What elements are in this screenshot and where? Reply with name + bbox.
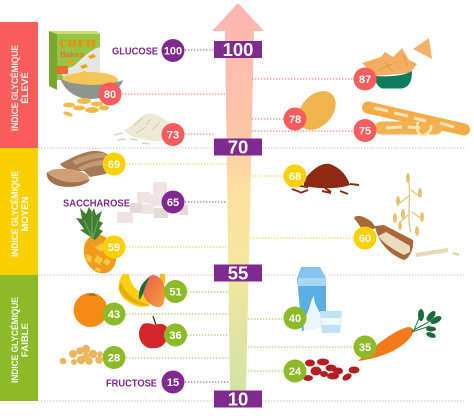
- icon: orange: [74, 293, 108, 327]
- panel: indice glycémique élevé: INDICE GLYCÉMIQUE: [9, 44, 21, 131]
- icon: corn flakes: flakes: [60, 50, 84, 59]
- badge: 28: [102, 346, 126, 369]
- panel: indice glycémique élevé: [0, 22, 38, 148]
- scale label 55: [214, 262, 262, 284]
- icon: kidney beans: [303, 358, 360, 382]
- panel: indice glycémique moyen: INDICE GLYCÉMIQUE: [9, 170, 21, 257]
- badge: 51: 51: [169, 286, 182, 298]
- icon: oats scoop: [354, 173, 459, 260]
- scale label 70: 70: [228, 136, 248, 158]
- scale label 10: 10: [228, 388, 248, 410]
- icon: tortilla chips: [362, 38, 432, 88]
- badge: 69: [102, 152, 126, 176]
- badge: 75: [354, 119, 376, 142]
- badge: 15: [162, 370, 184, 394]
- badge: 68: 68: [289, 171, 301, 183]
- badge: 51: [164, 280, 187, 303]
- badge: 73: 73: [167, 130, 179, 142]
- label: glucose: GLUCOSE: [112, 46, 158, 58]
- badge: 43: [102, 302, 126, 326]
- badge: 15: 15: [167, 377, 179, 389]
- badge: 35: [354, 336, 376, 358]
- icon: milk carton and glass: [297, 267, 342, 333]
- panel: indice glycémique faible: [0, 275, 38, 401]
- badge: 43: 43: [108, 309, 120, 321]
- badge: 24: 24: [289, 366, 302, 378]
- badge: 60: [354, 226, 376, 250]
- badge: 78: 78: [289, 114, 301, 126]
- badge: 80: 80: [104, 89, 116, 101]
- icon: rice: [114, 114, 170, 144]
- badge: 87: 87: [359, 74, 371, 86]
- badge: 60: 60: [359, 233, 371, 245]
- icon: banana and mango: [119, 274, 165, 307]
- badge: 100: [162, 39, 184, 62]
- badge: 69: 69: [108, 159, 120, 171]
- badge: 35: 35: [359, 342, 371, 354]
- icon: potato: [291, 84, 343, 137]
- icon: baguettes: [368, 108, 464, 135]
- badge: 80: [98, 82, 122, 106]
- badge: 59: 59: [108, 242, 120, 254]
- label: fructose: FRUCTOSE: [106, 378, 157, 390]
- badge: 40: [284, 306, 306, 330]
- badge: 36: 36: [169, 330, 182, 342]
- badge: 36: [164, 324, 187, 346]
- icon: pineapple: [76, 207, 122, 278]
- badge: 68: [284, 164, 306, 188]
- panel: indice glycémique faible: FAIBLE: [20, 322, 31, 357]
- badge: 28: 28: [108, 352, 120, 364]
- badge: 40: 40: [289, 313, 301, 325]
- panel: indice glycémique moyen: MOYEN: [20, 196, 31, 232]
- scale label 100: [214, 39, 262, 60]
- icon: corn flakes: corn: [59, 34, 96, 51]
- arrow: glycemic scale: [212, 3, 264, 392]
- scale label 10: [214, 388, 262, 410]
- icon: bread: [46, 151, 111, 187]
- label: saccharose: SACCHAROSE: [63, 198, 130, 210]
- panel: indice glycémique faible: INDICE GLYCÉMIQUE: [9, 296, 21, 383]
- badge: 87: [354, 68, 376, 90]
- icon: corn flakes: [49, 31, 123, 118]
- scale label 100: 100: [223, 39, 253, 60]
- badge: 100: 100: [164, 46, 182, 58]
- scale label 70: [214, 136, 262, 158]
- icon: chickpeas: [60, 345, 103, 365]
- badge: 59: [102, 236, 126, 258]
- scale label 55: 55: [228, 262, 248, 284]
- badge: 65: 65: [167, 197, 179, 209]
- badge: 78: [284, 108, 306, 130]
- badge: 24: [284, 360, 306, 382]
- badge: 75: 75: [359, 126, 371, 138]
- panel: indice glycémique élevé: ÉLEVÉ: [19, 72, 31, 104]
- icon: red rice: [292, 164, 359, 194]
- badge: 73: [162, 123, 184, 146]
- badge: 65: [162, 190, 184, 214]
- panel: indice glycémique moyen: [0, 148, 38, 275]
- icon: carrot: [358, 309, 443, 361]
- icon: sugar cubes: [117, 182, 188, 223]
- icon: apple: [139, 316, 168, 348]
